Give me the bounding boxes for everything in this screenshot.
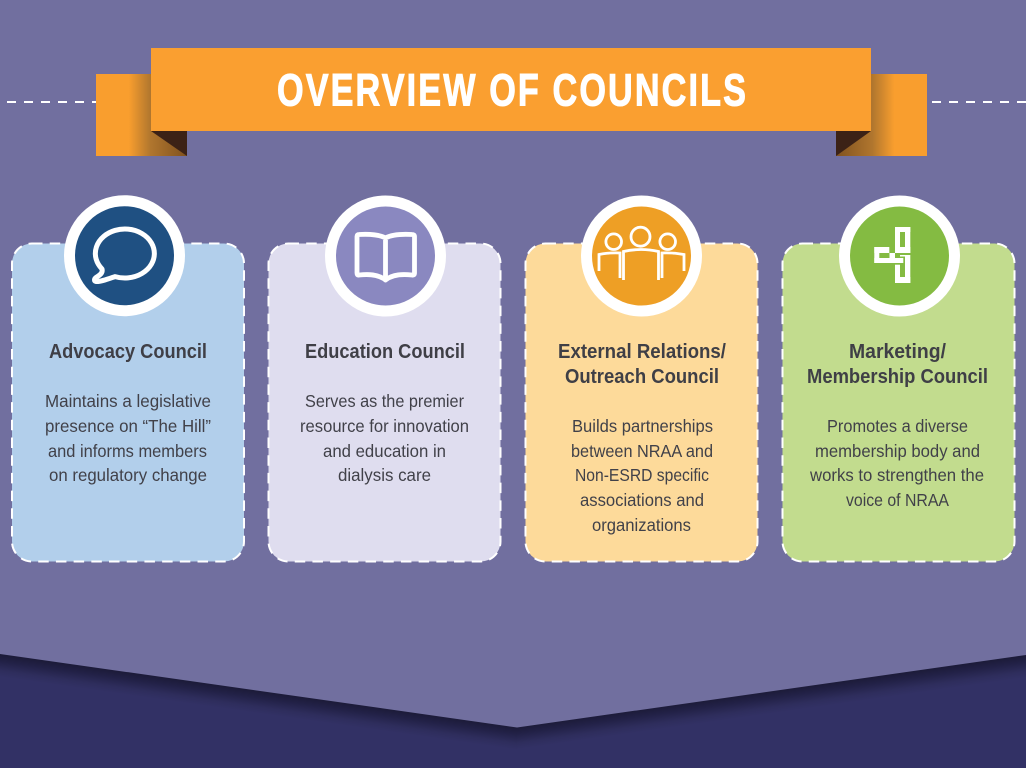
description: Builds partnerships — [572, 416, 713, 436]
description — [571, 416, 713, 535]
description — [300, 391, 469, 485]
title: OVERVIEW OF COUNCILS — [277, 66, 746, 116]
bottom chevron band — [0, 654, 1026, 768]
panel: Advocacy Council — [12, 195, 244, 561]
description: organizations — [592, 515, 691, 535]
panel: Education Council — [268, 196, 500, 562]
dashed line left — [7, 101, 96, 103]
dashed line right — [932, 101, 1026, 103]
description: between NRAA and — [571, 441, 713, 461]
description: membership body and — [815, 441, 980, 461]
icon: interlocking links — [839, 196, 960, 316]
heading: Marketing/ — [849, 341, 946, 363]
description — [45, 391, 211, 485]
heading: Outreach Council — [565, 366, 719, 388]
banner body — [151, 48, 871, 131]
heading — [558, 341, 726, 388]
description: associations and — [580, 490, 704, 510]
description: and informs members — [48, 441, 207, 461]
description: dialysis care — [338, 465, 431, 485]
description: Serves as the premier — [305, 391, 464, 411]
description: resource for innovation — [300, 416, 469, 436]
description: works to strengthen the — [809, 465, 984, 485]
heading — [807, 341, 988, 388]
heading: Advocacy Council — [49, 341, 207, 363]
description: presence on “The Hill” — [45, 416, 211, 436]
heading: Education Council — [305, 341, 465, 363]
panel: External Relations/Outreach Council — [526, 196, 758, 562]
description: and education in — [323, 441, 446, 461]
description — [809, 416, 984, 510]
panel: Marketing/Membership Council — [782, 196, 1014, 562]
heading: Membership Council — [807, 366, 988, 388]
icon: open book — [325, 196, 446, 316]
title banner — [96, 48, 927, 156]
icon: group of people — [581, 196, 702, 316]
icon: speech bubble — [64, 195, 185, 316]
left ribbon tail — [96, 74, 187, 156]
heading: External Relations/ — [558, 341, 726, 363]
description: Promotes a diverse — [827, 416, 968, 436]
description: voice of NRAA — [846, 490, 949, 510]
right ribbon tail — [836, 74, 927, 156]
description: Maintains a legislative — [45, 391, 211, 411]
description: on regulatory change — [49, 465, 207, 485]
description: Non-ESRD specific — [575, 465, 709, 485]
